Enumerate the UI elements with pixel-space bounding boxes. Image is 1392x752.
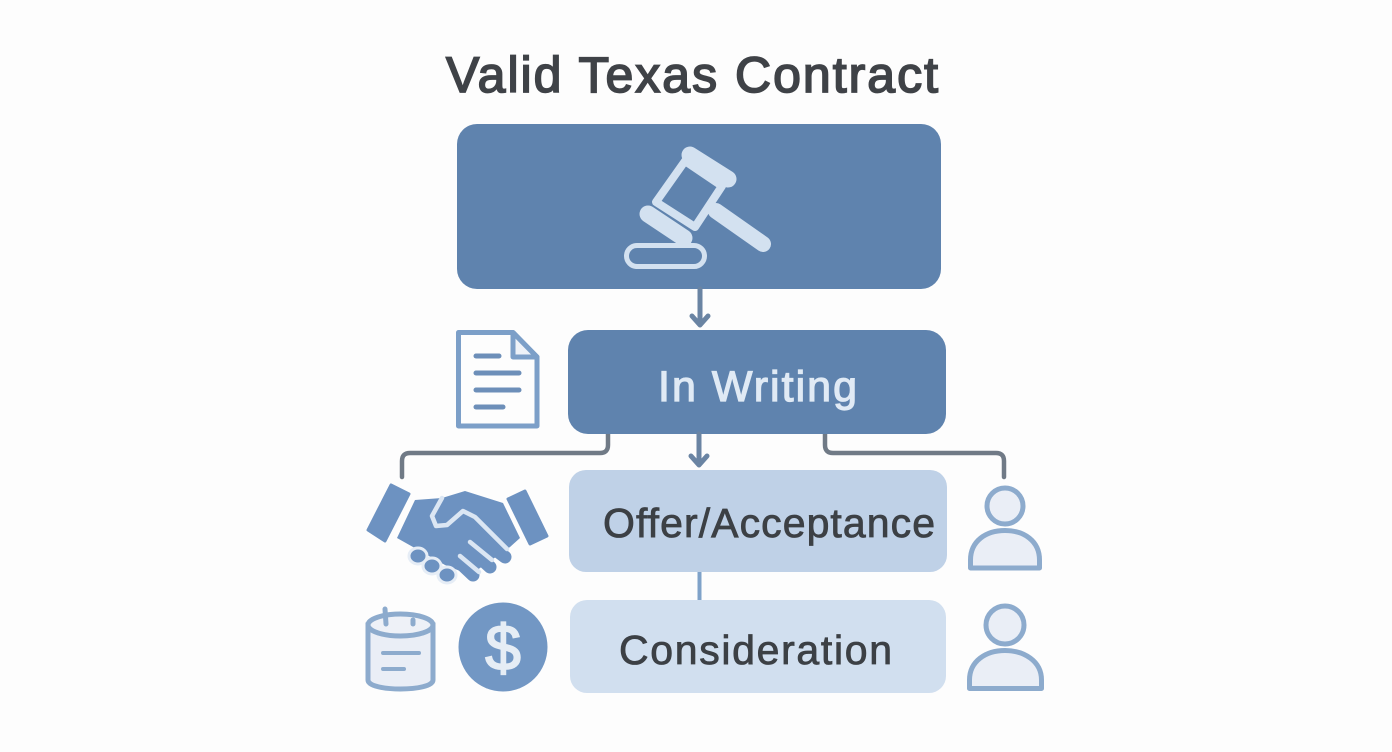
icon: calendar xyxy=(368,609,433,689)
label: consideration: Consideration xyxy=(619,627,892,673)
connector: right branch xyxy=(825,434,1004,477)
panel: in writing xyxy=(568,330,946,434)
connector: offer to consideration xyxy=(698,572,702,600)
arrow: gavel to in writing xyxy=(692,289,708,325)
icon: dollar coin xyxy=(458,602,548,692)
connector: left branch xyxy=(402,434,608,477)
arrow: in writing to offer xyxy=(691,434,707,465)
panel: gavel header xyxy=(457,124,941,289)
label: offer/acceptance: Offer/Acceptance xyxy=(603,500,935,546)
icon: document xyxy=(458,332,537,426)
title: Valid Texas Contract xyxy=(446,47,938,103)
icon: person top xyxy=(970,488,1040,568)
icon: dollar coin: $ xyxy=(485,612,521,684)
icon: person bottom xyxy=(970,606,1042,688)
panel: consideration xyxy=(570,600,946,693)
icon: handshake xyxy=(368,485,547,583)
icon: gavel xyxy=(626,155,763,266)
panel: offer/acceptance xyxy=(569,470,947,572)
label: in writing: In Writing xyxy=(658,363,857,411)
